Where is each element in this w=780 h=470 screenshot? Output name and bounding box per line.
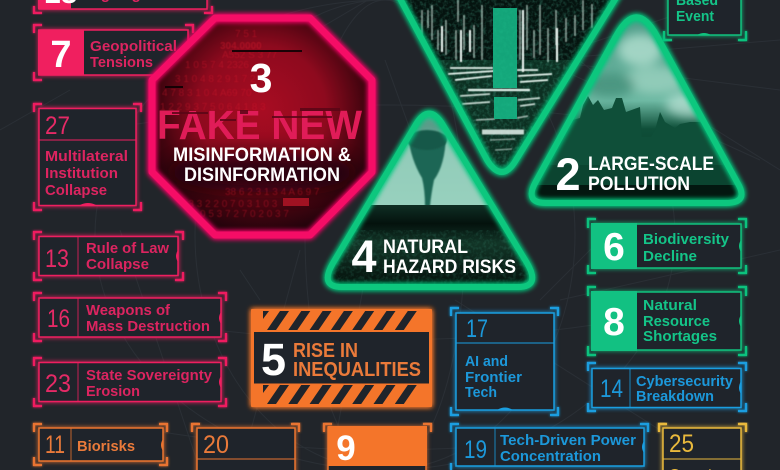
number: 4 — [351, 231, 377, 282]
label: Shortages — [643, 328, 717, 345]
label: Resource — [643, 313, 710, 330]
label: INEQUALITIES — [293, 359, 421, 381]
label — [643, 297, 717, 345]
label: Breakdown — [636, 388, 714, 405]
panel: misinformation octagon — [152, 18, 372, 235]
data texture: 0 5 3 7 2 7 0 2 0 3 7 — [200, 209, 289, 220]
label — [636, 373, 734, 405]
panel: natural hazard triangle — [320, 113, 545, 290]
factory skyline — [539, 96, 734, 185]
hazard stripes — [254, 311, 429, 404]
label — [465, 353, 522, 401]
tornado funnel — [408, 132, 446, 206]
panel: risk 23 — [34, 358, 226, 406]
label: Geopolitical — [90, 38, 177, 55]
label: Institution — [45, 165, 118, 182]
label: Tensions — [90, 54, 153, 71]
panel: risk 14 — [588, 363, 746, 411]
number: 11 — [45, 431, 65, 459]
panel: risk 27 — [34, 104, 141, 210]
number: 27 — [45, 112, 70, 140]
number: 2 — [555, 149, 581, 200]
label — [86, 302, 210, 335]
label: Mass Destruction — [86, 318, 210, 335]
label: Tech — [465, 384, 497, 401]
label: Cybersecurity — [636, 373, 734, 390]
number: 17 — [466, 315, 488, 343]
label: Collapse — [86, 256, 149, 273]
cloud — [585, 34, 714, 117]
panel: pollution triangle — [520, 17, 760, 210]
label — [293, 340, 421, 381]
label — [86, 367, 213, 400]
label — [676, 0, 718, 25]
exclamation mark — [493, 8, 517, 119]
panel: risk 19 — [451, 424, 648, 470]
label: Tech-Driven Power — [500, 432, 636, 449]
number: 23 — [45, 370, 71, 398]
panel: nature-based event — [664, 0, 746, 40]
title — [588, 153, 714, 195]
panel: risk 7 — [34, 25, 193, 80]
number: 8 — [603, 301, 625, 344]
data texture: 4 7 8 3 1 0 4 A69 70 — [162, 88, 252, 99]
panel: risk 9 — [324, 424, 431, 470]
label: Biorisks — [77, 438, 135, 455]
label: Concentration — [500, 448, 601, 465]
label — [86, 240, 169, 273]
label — [643, 231, 730, 265]
number: 6 — [603, 226, 625, 269]
data texture: A552 S 3 77 — [222, 50, 277, 61]
panel: risk 17 — [451, 308, 558, 415]
dark band behind title — [170, 152, 354, 192]
panel: risk 8 — [588, 287, 746, 355]
data texture: 7 3 3 2 2 0 7 0 3 1 0 3 — [180, 199, 278, 210]
title: POLLUTION — [588, 173, 690, 195]
title: LARGE-SCALE — [588, 153, 714, 175]
number: 5 — [261, 334, 286, 385]
glitch headline: FAKE NEW — [157, 102, 362, 148]
number: 14 — [600, 375, 623, 403]
data texture — [160, 29, 320, 220]
number: 19 — [464, 436, 487, 464]
title: DISINFORMATION — [184, 165, 340, 186]
label: Rule of Law — [86, 240, 169, 257]
label: Natural — [643, 297, 697, 314]
panel: risk 25 — [659, 424, 746, 470]
number: 20 — [203, 431, 229, 459]
label: Frontier — [465, 369, 522, 386]
number: 7 — [50, 34, 72, 76]
data texture: 38 6 2 3 1 3 4 A 6 9 7 — [225, 187, 320, 198]
label — [500, 432, 636, 465]
panel: risk 20 — [192, 424, 299, 470]
title — [173, 145, 351, 186]
label: Biodiversity — [643, 231, 730, 248]
number: 9 — [336, 429, 356, 468]
data texture: 1 2 2 9 3 7 5 0 6 4 1 8 3 — [160, 102, 266, 113]
panel: risk 18 — [34, 0, 212, 13]
glitch slices — [172, 108, 340, 121]
panel: risk 16 — [34, 293, 226, 341]
panel: biodiversity forest triangle — [385, 0, 627, 180]
label: Event — [676, 8, 714, 25]
label: Decline — [643, 248, 697, 265]
number: 13 — [45, 245, 69, 273]
number: 25 — [669, 430, 694, 458]
title — [383, 236, 516, 278]
label — [45, 148, 128, 199]
label: Erosion — [86, 383, 140, 400]
title: HAZARD RISKS — [383, 256, 516, 278]
label: State Sovereignty — [86, 367, 213, 384]
panel: risk 11 — [34, 424, 167, 465]
panel: risk 6 — [588, 219, 746, 273]
data texture: 7 5 1 — [235, 29, 258, 40]
label: AI and — [465, 353, 508, 370]
panel: rise in inequalities — [251, 309, 432, 407]
panel: risk 13 — [34, 232, 183, 280]
number: 16 — [47, 305, 70, 333]
title: NATURAL — [383, 236, 468, 258]
data texture: 304.0000 — [220, 41, 262, 52]
title: MISINFORMATION & — [173, 145, 351, 166]
label: Multilateral — [45, 148, 128, 165]
label: RISE IN — [293, 340, 358, 362]
label: Collapse — [45, 182, 107, 199]
data texture: 1 0 5 7 4 2326 — [185, 60, 249, 71]
label — [90, 38, 177, 71]
label: Weapons of — [86, 302, 171, 319]
data texture: 3 1 0 4 8 2 9 1 7 2 — [175, 74, 256, 85]
number: 3 — [250, 55, 272, 101]
